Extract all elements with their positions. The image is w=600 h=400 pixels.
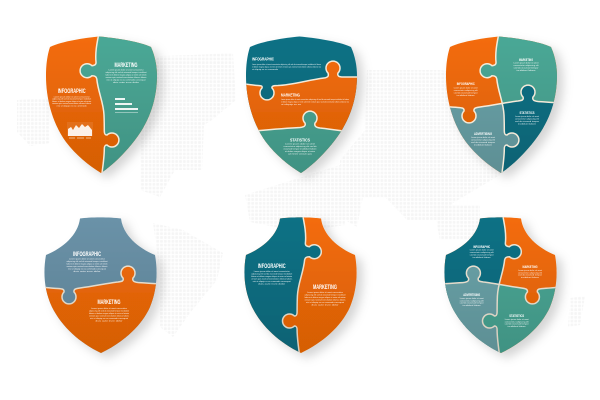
text block: marketing body: veniam quis nostrud exercitation ullamco laboris xyxy=(106,76,147,79)
text block: infographic body xyxy=(454,86,478,97)
text block: marketing body: labore et dolore magna aliqua ut enim ad minim xyxy=(89,312,129,315)
text block: infographic body: Lorem ipsum dolor sit amet consectetur xyxy=(54,96,90,98)
text block: infographic body: veniam quis nostrud exercitation ullamco laboris xyxy=(66,265,108,268)
area chart xyxy=(68,122,92,138)
text block: infographic body: Lorem ipsum dolor sit amet consectetur adipiscing elit sed do eiusmod tempor incididunt ut labore xyxy=(252,63,322,66)
text block: infographic body: veniam quis nostrud exercitation ullamco laboris xyxy=(251,278,293,280)
heading: infographic: INFOGRAPHIC xyxy=(258,263,286,270)
text block: infographic body: consectetur adipiscing elit xyxy=(470,251,494,254)
heading: marketing: MARKETING xyxy=(313,284,337,291)
text block: infographic body xyxy=(251,270,293,286)
text block: advertising body: Lorem ipsum dolor sit amet xyxy=(460,297,484,300)
text block: statistics body: eiusmod tempor incididunt labore xyxy=(284,148,317,150)
shield 6: four-piece puzzle, waisted xyxy=(444,217,566,360)
text block: infographic body: nisi ut aliquip ex ea commodo consequat xyxy=(253,280,291,283)
shield 3: four-piece puzzle xyxy=(446,36,567,180)
text block: infographic body: Lorem ipsum dolor sit amet consectetur xyxy=(69,258,105,260)
text block: infographic body: incididunt labore xyxy=(473,256,492,259)
text block: advertising body xyxy=(460,297,484,307)
heading: advertising: ADVERTISING xyxy=(463,293,480,297)
text block: advertising body: sed do eiusmod tempor xyxy=(471,141,495,144)
text block: statistics body xyxy=(505,318,529,328)
text block: marketing body: sed do eiusmod tempor xyxy=(518,274,542,277)
text block: infographic body: ut aliquip ex ea commodo xyxy=(252,68,279,71)
heading: statistics: STATISTICS xyxy=(509,314,525,318)
text block: statistics body: ad minim veniam quis xyxy=(288,154,313,156)
text block: infographic body xyxy=(66,258,108,273)
text block: statistics body: Lorem ipsum dolor sit amet xyxy=(515,115,539,118)
text block: marketing body: labore et dolore magna aliqua ut enim ad minim xyxy=(304,296,346,299)
text block: marketing body xyxy=(89,307,130,322)
text block: marketing body: duis aute irure dolor xyxy=(96,320,123,322)
text block: infographic body: Lorem ipsum dolor sit amet xyxy=(454,86,478,90)
text block: infographic body: adipiscing elit sed do eiusmod tempor incididunt xyxy=(52,98,92,101)
text block: marketing body xyxy=(514,62,539,72)
text block: infographic body: duis aute irure dolor xyxy=(258,282,286,286)
text block: infographic body xyxy=(52,96,92,107)
text block: infographic body: labore et dolore magna aliqua ut enim ad minim xyxy=(251,275,292,278)
text block: statistics body: incididunt labore xyxy=(518,122,537,126)
text block: marketing body xyxy=(518,269,542,279)
bar chart xyxy=(115,98,138,113)
heading: infographic: INFOGRAPHIC xyxy=(58,88,86,95)
heading: statistics: STATISTICS xyxy=(520,111,535,115)
text block: infographic body: sed do eiusmod tempor xyxy=(454,92,478,94)
heading: infographic: INFOGRAPHIC xyxy=(457,82,475,86)
heading: infographic: INFOGRAPHIC xyxy=(73,251,101,258)
text block: statistics body: consectetur adipiscing elit sed do xyxy=(284,145,317,148)
text block: marketing body: adipiscing elit sed do eiusmod tempor incididunt xyxy=(304,294,346,296)
text block: marketing body: ut aliquip ex ea xyxy=(281,103,302,106)
text block: marketing body: nisi ut aliquip ex ea commodo consequat xyxy=(90,317,128,320)
shield 2: three-piece horizontal puzzle xyxy=(246,36,367,180)
text block: marketing body xyxy=(281,98,350,106)
text block: marketing body: adipiscing elit sed do eiusmod tempor incididunt xyxy=(89,310,129,312)
text block: marketing body: sed do eiusmod tempor xyxy=(514,66,539,70)
text block: infographic body: nisi ut aliquip ex ea commodo xyxy=(57,104,88,107)
text block: statistics body: et dolore magna aliqua ut enim xyxy=(285,150,315,153)
text block: marketing body xyxy=(106,68,147,84)
text block: infographic body: adipiscing elit sed do eiusmod tempor incididunt xyxy=(66,260,108,263)
text block: marketing body: veniam quis nostrud exercitation ullamco laboris xyxy=(304,298,346,302)
text block: infographic body: incididunt labore xyxy=(457,94,476,97)
text block: infographic body: Lorem ipsum dolor sit amet xyxy=(470,248,494,252)
text block: marketing body xyxy=(304,291,346,306)
text block: marketing body: incididunt labore xyxy=(521,276,540,279)
heading: infographic: INFOGRAPHIC xyxy=(473,245,490,249)
shield 5: two-piece vertical puzzle, waisted xyxy=(244,217,366,360)
text block: marketing body: incididunt labore xyxy=(516,69,536,72)
heading: marketing: MARKETING xyxy=(522,265,538,269)
heading: statistics: STATISTICS xyxy=(290,138,310,142)
text block: statistics body: sed do eiusmod tempor xyxy=(515,120,539,123)
text block: marketing body: Lorem ipsum dolor sit amet xyxy=(514,62,539,64)
text block: statistics body: Lorem ipsum dolor sit amet xyxy=(285,142,315,146)
heading: marketing: MARKETING xyxy=(519,58,533,62)
text block: marketing body: consectetur adipiscing elit xyxy=(514,64,539,67)
heading: marketing: MARKETING xyxy=(114,62,138,69)
text block: advertising body: incididunt labore xyxy=(474,144,493,146)
text block: marketing body: nisi ut aliquip ex ea commodo consequat xyxy=(106,78,146,82)
text block: advertising body: consectetur adipiscing elit xyxy=(471,138,495,142)
text block: advertising body: consectetur adipiscing elit xyxy=(460,299,484,302)
text block: advertising body: Lorem ipsum dolor sit amet xyxy=(471,136,495,139)
text block: statistics body xyxy=(284,142,317,156)
text block: marketing body: Lorem ipsum dolor sit amet consectetur xyxy=(307,291,343,294)
heading: advertising: ADVERTISING xyxy=(474,132,492,136)
text block: advertising body: incididunt labore xyxy=(463,304,482,307)
text block: infographic body: nisi ut aliquip ex ea commodo consequat xyxy=(68,268,106,270)
text block: infographic body: consectetur adipiscing elit xyxy=(454,89,478,92)
text block: infographic body: veniam quis nostrud exercitation ullamco laboris xyxy=(52,102,92,105)
text block: infographic body: sed do eiusmod tempor xyxy=(470,254,494,256)
text block: advertising body xyxy=(471,136,495,146)
text block: infographic body: duis aute irure dolor xyxy=(74,270,101,273)
heading: infographic: INFOGRAPHIC xyxy=(252,56,274,62)
text block: advertising body: sed do eiusmod tempor xyxy=(460,302,484,305)
shield 1: two-piece vertical puzzle xyxy=(46,36,167,180)
text block: marketing body: duis aute irure dolor xyxy=(312,304,339,306)
text block: statistics body: Lorem ipsum dolor sit amet xyxy=(505,318,529,321)
text block: statistics body: consectetur adipiscing elit xyxy=(505,320,529,323)
text block: infographic body: labore et dolore magna aliqua ut enim ad minim xyxy=(52,100,91,103)
text block: marketing body: Lorem ipsum dolor sit amet consectetur adipiscing elit sed do eiusmod tempor incididunt ut labore xyxy=(281,98,350,101)
heading: marketing: MARKETING xyxy=(98,299,121,306)
text block: marketing body: veniam quis nostrud exercitation ullamco laboris xyxy=(89,314,130,318)
background dotted world map xyxy=(17,53,585,337)
text block: statistics body: sed do eiusmod tempor xyxy=(505,323,529,326)
heading: marketing: MARKETING xyxy=(281,92,300,98)
text block: infographic body xyxy=(470,248,494,259)
text block: marketing body: duis aute irure dolor xyxy=(113,81,139,84)
text block: marketing body: Lorem ipsum dolor sit amet consectetur xyxy=(108,68,144,72)
text block: statistics body xyxy=(515,115,539,126)
text block: marketing body: nisi ut aliquip ex ea commodo consequat xyxy=(306,301,344,304)
text block: marketing body: Lorem ipsum dolor sit amet xyxy=(518,269,542,272)
text block: infographic body xyxy=(252,63,322,71)
shield 4: two-piece horizontal puzzle xyxy=(44,217,166,360)
text block: infographic body: Lorem ipsum dolor sit amet consectetur xyxy=(254,270,290,273)
text block: infographic body: labore et dolore magna aliqua ut enim ad minim xyxy=(66,262,108,266)
text block: marketing body: Lorem ipsum dolor sit amet consectetur xyxy=(91,307,127,310)
text block: marketing body: adipiscing elit sed do eiusmod tempor incididunt xyxy=(106,71,147,74)
text block: infographic body: et dolore magna aliqua ut enim ad minim veniam quis nostrud exercitation ullamco laboris nisi xyxy=(252,66,321,68)
text block: marketing body: labore et dolore magna aliqua ut enim ad minim xyxy=(106,74,147,76)
text block: marketing body: et dolore magna aliqua ut enim ad minim veniam quis nostrud exercitation ullamco laboris nisi xyxy=(281,100,349,104)
text block: statistics body: consectetur adipiscing elit xyxy=(515,118,539,120)
text block: marketing body: consectetur adipiscing elit xyxy=(518,271,542,274)
text block: infographic body: adipiscing elit sed do eiusmod tempor incididunt xyxy=(251,272,293,276)
text block: statistics body: incididunt labore xyxy=(508,325,527,328)
